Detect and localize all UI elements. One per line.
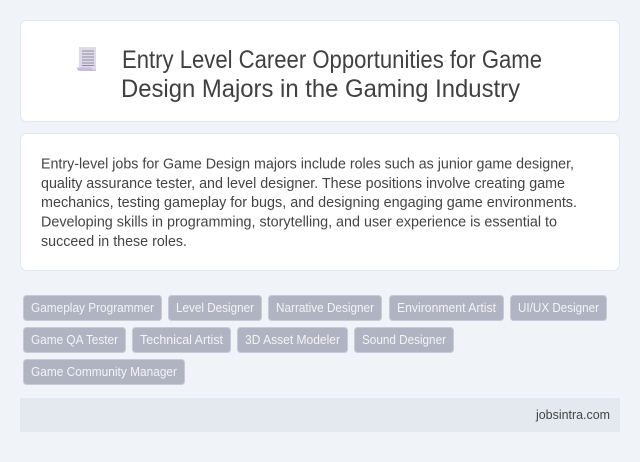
- tag: Sound Designer: [354, 328, 454, 352]
- tag: 3D Asset Modeler: [238, 328, 348, 352]
- title: Design Majors in the Gaming Industry: [121, 75, 520, 103]
- tag: Environment Artist: [390, 296, 504, 320]
- tag: 3D Asset Modeler: 3D Asset Modeler: [245, 333, 340, 347]
- description text: Entry-level jobs for Game Design majors include roles such as junior game designer,: [41, 156, 574, 172]
- tag: Narrative Designer: Narrative Designer: [276, 301, 374, 315]
- footer bar: [20, 398, 620, 432]
- panel: description: [20, 134, 620, 270]
- tag: Gameplay Programmer: [24, 296, 162, 320]
- title: Entry Level Career Opportunities for Game: [122, 46, 542, 74]
- tag: Gameplay Programmer: Gameplay Programmer: [31, 301, 154, 315]
- tag: UI/UX Designer: UI/UX Designer: [518, 301, 599, 315]
- description text: quality assurance tester, and level designer. These positions involve creating game: [41, 176, 565, 192]
- tag: Game Community Manager: Game Community Manager: [31, 365, 177, 379]
- icon: paper scroll: [77, 47, 96, 71]
- tag: Game QA Tester: Game QA Tester: [31, 333, 118, 347]
- tag: Game Community Manager: [24, 360, 184, 384]
- tag: Technical Artist: Technical Artist: [140, 333, 223, 347]
- tag: Game QA Tester: [24, 328, 126, 352]
- panel: title card: [20, 20, 620, 122]
- tag: Technical Artist: [132, 328, 230, 352]
- tag: Level Designer: [168, 296, 262, 320]
- footer text: jobsintra.com: [535, 408, 610, 422]
- tag: Level Designer: Level Designer: [176, 301, 254, 315]
- tag: Sound Designer: Sound Designer: [362, 333, 446, 347]
- description text: mechanics, testing gameplay for bugs, and designing engaging game environments.: [41, 195, 577, 211]
- description text: [41, 156, 577, 250]
- title: [121, 46, 542, 103]
- tag: Narrative Designer: [268, 296, 382, 320]
- tag: Environment Artist: Environment Artist: [397, 301, 496, 315]
- tags: [24, 296, 606, 384]
- description text: succeed in these roles.: [41, 234, 187, 250]
- tag: UI/UX Designer: [510, 296, 606, 320]
- description text: Developing skills in programming, storytelling, and user experience is essential to: [41, 214, 557, 230]
